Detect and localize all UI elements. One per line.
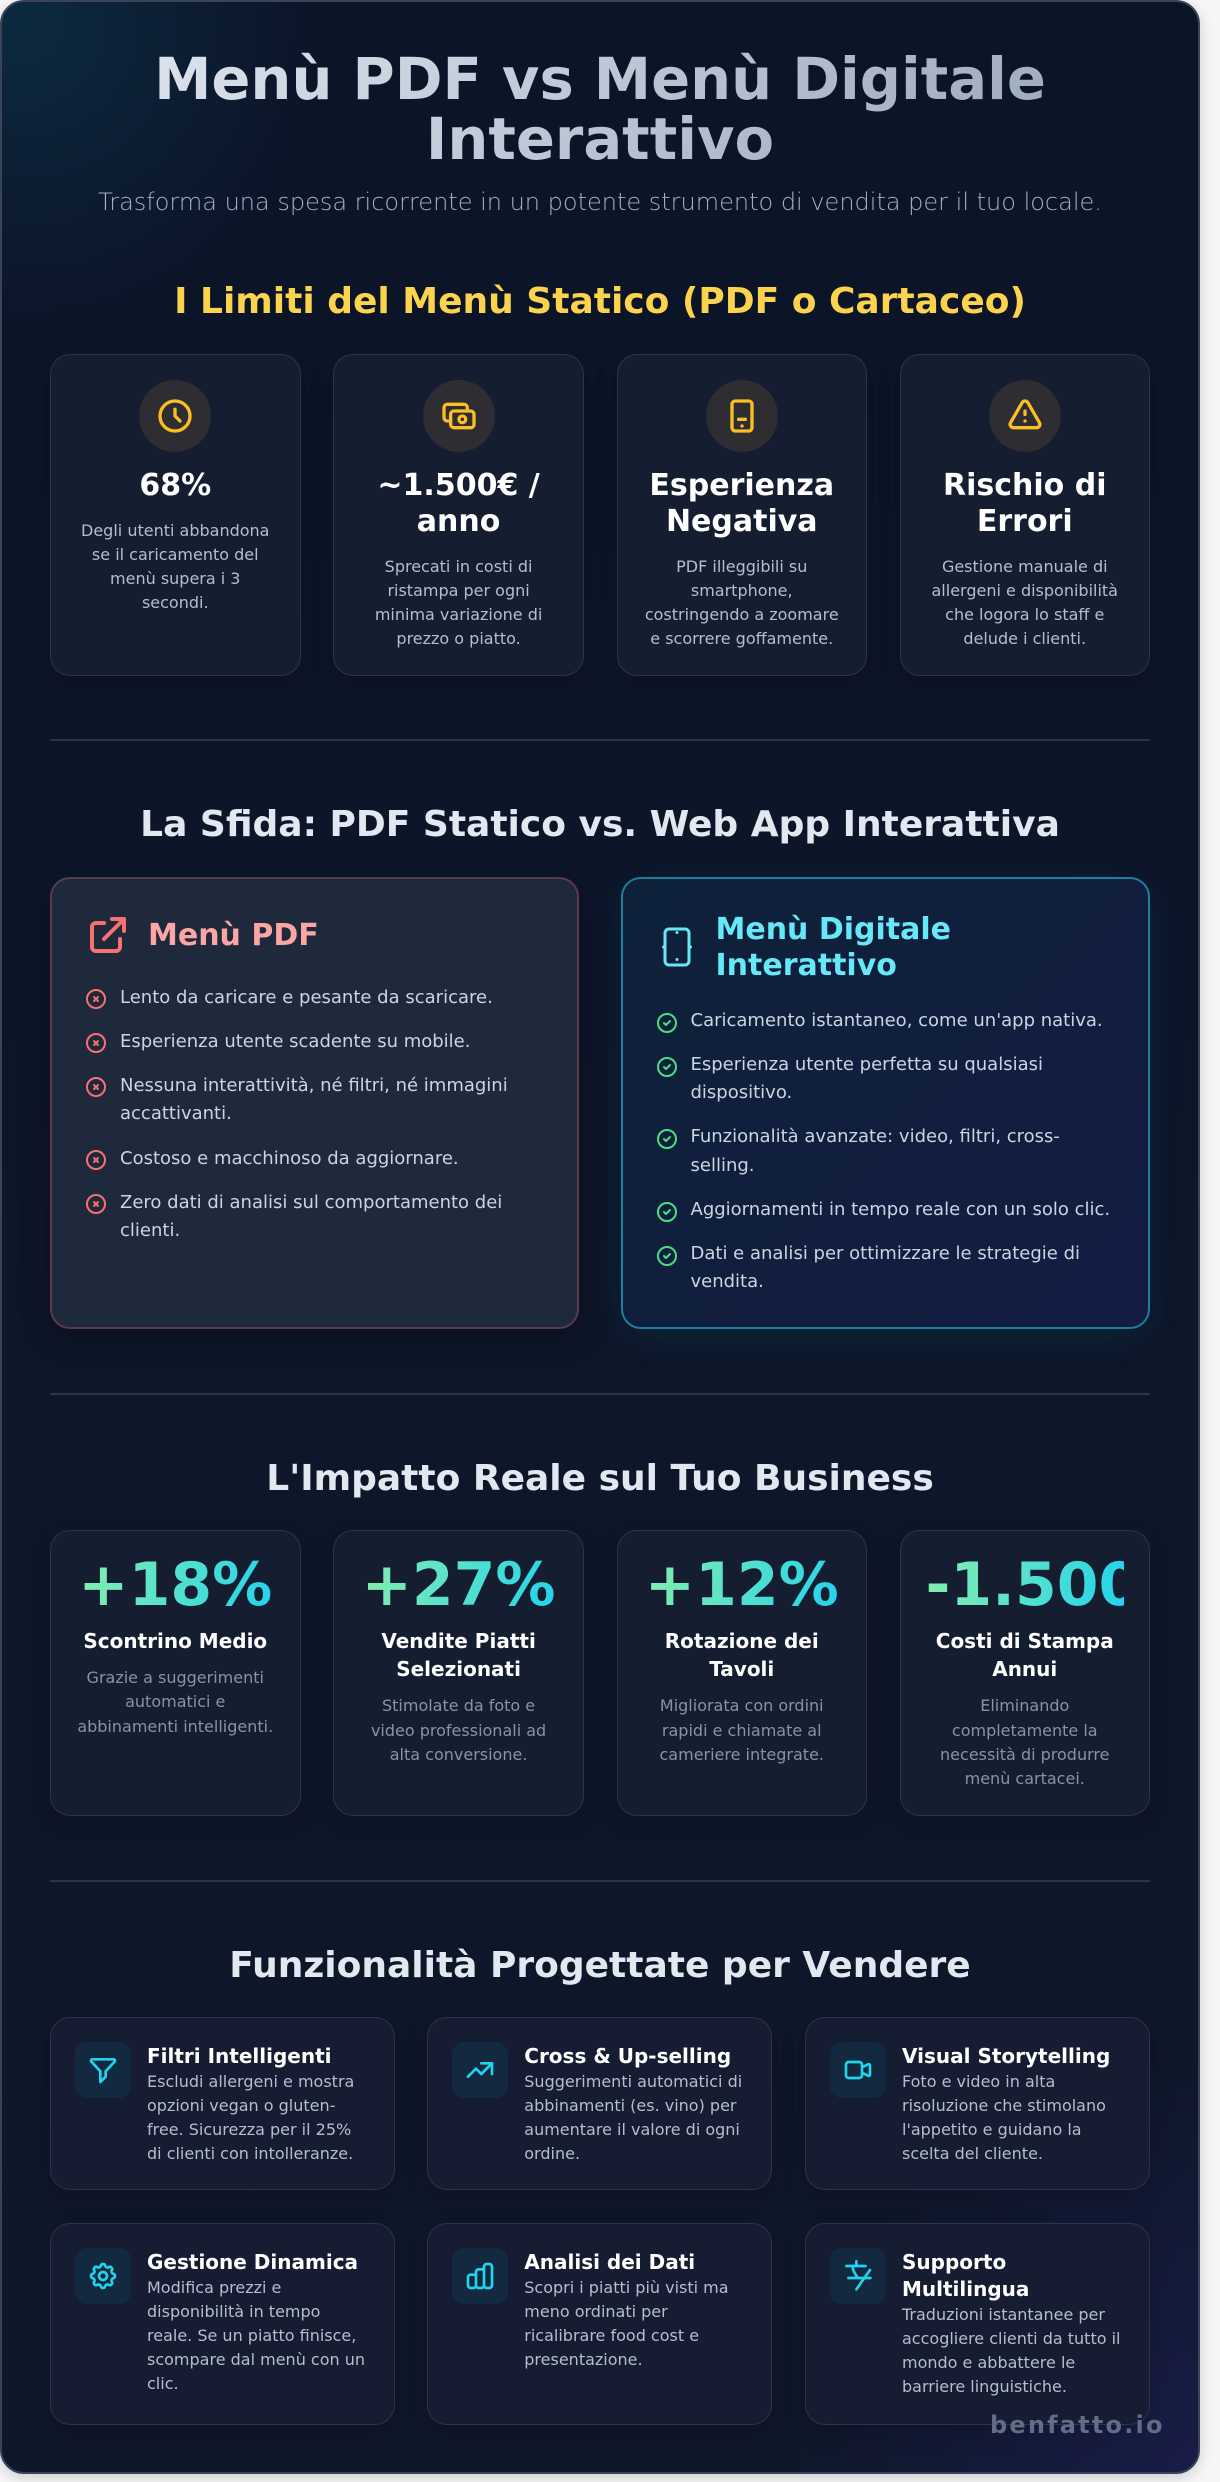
watermark: benfatto.io <box>990 2411 1165 2439</box>
list of benefits: Dati e analisi per ottimizzare le strategie di vendita. <box>690 1243 1080 1292</box>
description: Sprecati in costi di ristampa per ogni minima variazione di prezzo o piatto. <box>375 557 542 648</box>
list of benefits: Aggiornamenti in tempo reale con un solo clic. <box>690 1199 1110 1220</box>
list of benefits: Caricamento istantaneo, come un'app nativa. <box>690 1010 1103 1031</box>
feature text: Analisi dei Dati <box>524 2250 695 2274</box>
panel: stat print costs <box>900 1530 1150 1816</box>
panel: stat table rotation <box>616 1530 867 1816</box>
subtitle: Trasforma una spesa ricorrente in un potente strumento di vendita per il tuo locale. <box>98 188 1102 216</box>
feature text: Visual Storytelling <box>902 2044 1110 2068</box>
panel: PDF menu <box>50 877 579 1329</box>
icon: trending up <box>452 2042 508 2098</box>
panel: stat average ticket <box>50 1530 300 1816</box>
icon: external link <box>90 916 126 953</box>
feature text: Cross & Up-selling <box>524 2044 731 2068</box>
stat label: Vendite Piatti Selezionati <box>381 1629 536 1681</box>
icon: warning <box>989 380 1061 452</box>
list of drawbacks: Esperienza utente scadente su mobile. <box>120 1031 470 1052</box>
panel: risk of errors <box>900 354 1150 676</box>
stat label: Scontrino Medio <box>83 1629 267 1653</box>
panel: data analysis <box>427 2223 772 2425</box>
icon: video camera <box>830 2042 886 2098</box>
list of benefits <box>657 1010 1110 1292</box>
feature text: Suggerimenti automatici di abbinamenti (es. vino) per aumentare il valore di ogni ordine. <box>524 2072 742 2163</box>
panel heading: Menù PDF <box>148 918 319 953</box>
icon: clock <box>139 380 211 452</box>
icon: cash <box>423 380 495 452</box>
title: Menù PDF vs Menù Digitale Interattivo <box>154 46 1046 173</box>
stat heading: 68% <box>139 468 211 503</box>
icon: phone <box>706 380 778 452</box>
feature text: Traduzioni istantanee per accogliere clienti da tutto il mondo e abbattere le barriere linguistiche. <box>902 2305 1120 2396</box>
stat number: +27% <box>362 1550 556 1620</box>
panel: digital menu <box>620 877 1150 1329</box>
stat description: Eliminando completamente la necessità di produrre menù cartacei. <box>940 1696 1109 1788</box>
feature text: Foto e video in alta risoluzione che stimolano l'appetito e guidano la scelta del cliente. <box>902 2072 1106 2163</box>
panel: smart filters <box>50 2017 395 2190</box>
feature text: Filtri Intelligenti <box>147 2044 332 2068</box>
icon: translate <box>830 2248 886 2304</box>
stat heading: ~1.500€ / anno <box>377 468 540 539</box>
panel: stat selected dishes <box>333 1530 584 1816</box>
list of benefits: Funzionalità avanzate: video, filtri, cross-selling. <box>690 1126 1060 1176</box>
stat description: Migliorata con ordini rapidi e chiamate al cameriere integrate. <box>660 1696 824 1764</box>
stat number: -1.500€ <box>926 1550 1182 1620</box>
description: PDF illeggibili su smartphone, costringendo a zoomare e scorrere goffamente. <box>645 557 839 648</box>
panel: 68% <box>50 354 300 676</box>
panel: cross selling <box>427 2017 772 2190</box>
panel: dynamic management <box>50 2223 395 2425</box>
stat number: +12% <box>645 1550 839 1620</box>
stat description: Stimolate da foto e video professionali ad alta conversione. <box>371 1696 546 1764</box>
stat label: Rotazione dei Tavoli <box>665 1629 819 1681</box>
list of benefits: Esperienza utente perfetta su qualsiasi dispositivo. <box>690 1054 1043 1103</box>
panel: cost <box>333 354 584 676</box>
heading: limits: I Limiti del Menù Statico (PDF o Cartaceo) <box>174 281 1026 322</box>
heading: impact: L'Impatto Reale sul Tuo Business <box>266 1458 934 1499</box>
feature text: Supporto Multilingua <box>902 2250 1029 2301</box>
feature text: Escludi allergeni e mostra opzioni vegan o gluten-free. Sicurezza per il 25% di clienti con intolleranze. <box>147 2072 354 2163</box>
stat label: Costi di Stampa Annui <box>936 1629 1114 1681</box>
icon: phone outline <box>662 928 692 966</box>
icon: funnel <box>75 2042 131 2098</box>
feature text <box>902 2250 1120 2396</box>
feature text: Modifica prezzi e disponibilità in tempo reale. Se un piatto finisce, scompare dal menù con un clic. <box>147 2278 365 2393</box>
heading: features: Funzionalità Progettate per Vendere <box>229 1945 971 1986</box>
heading: challenge: La Sfida: PDF Statico vs. Web App Interattiva <box>140 804 1060 845</box>
icon: bar chart <box>452 2248 508 2304</box>
feature text: Scopri i piatti più visti ma meno ordinati per ricalibrare food cost e presentazione. <box>524 2278 729 2369</box>
description: Gestione manuale di allergeni e disponibilità che logora lo staff e delude i clienti. <box>932 557 1118 648</box>
feature text: Gestione Dinamica <box>147 2250 358 2274</box>
stat number: +18% <box>78 1550 272 1620</box>
list of drawbacks: Nessuna interattività, né filtri, né immagini accattivanti. <box>120 1075 508 1124</box>
panel: negative experience <box>616 354 867 676</box>
description: Degli utenti abbandona se il caricamento del menù supera i 3 secondi. <box>81 521 269 612</box>
list of drawbacks: Zero dati di analisi sul comportamento dei clienti. <box>120 1192 502 1241</box>
list of drawbacks: Lento da caricare e pesante da scaricare. <box>120 987 493 1008</box>
stat description: Grazie a suggerimenti automatici e abbinamenti intelligenti. <box>77 1668 273 1736</box>
stat number <box>926 1556 1124 1615</box>
panel heading: Menù Digitale Interattivo <box>716 912 951 983</box>
panel: visual storytelling <box>805 2017 1150 2190</box>
heading: Rischio di Errori <box>943 468 1106 539</box>
heading: Esperienza Negativa <box>649 468 834 539</box>
panel: multilanguage <box>805 2223 1150 2425</box>
icon: cog <box>75 2248 131 2304</box>
list of drawbacks: Costoso e macchinoso da aggiornare. <box>120 1148 459 1169</box>
list of drawbacks <box>86 987 508 1241</box>
